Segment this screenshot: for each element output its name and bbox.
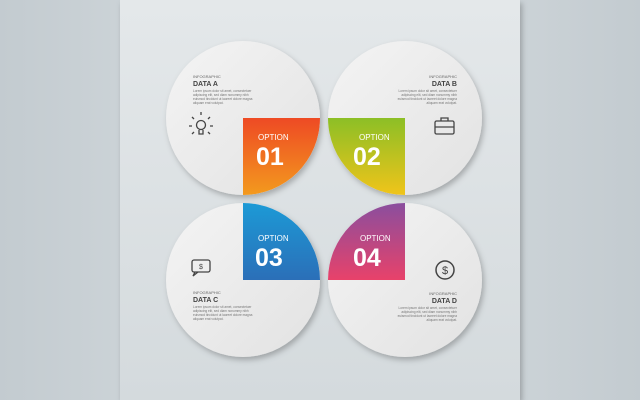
- text: data C: adipiscing elit, sed diam nonummy nibh: [193, 309, 249, 313]
- text: data D: euismod tincidunt ut laoreet dolore magna: [398, 314, 457, 318]
- circle C: [166, 203, 320, 357]
- text: data B: Lorem ipsum dolor sit amet, consectetuer: [399, 89, 458, 93]
- wedge: option 04: OPTION: [360, 234, 391, 243]
- icon: dollar coin: [436, 261, 454, 279]
- wedge: option 01: 01: [256, 143, 284, 171]
- text: data B: euismod tincidunt ut laoreet dolore magna: [398, 97, 457, 101]
- icon: lightbulb: [189, 112, 213, 134]
- wedge: option 04: 04: [353, 244, 381, 272]
- circle B: [328, 41, 482, 195]
- text: data B: aliquam erat volutpat.: [427, 101, 457, 105]
- text: data A: adipiscing elit, sed diam nonummy nibh: [193, 93, 249, 97]
- wedge: option 02: 02: [353, 143, 381, 171]
- wedge: option 01: OPTION: [258, 133, 289, 142]
- text: data A: INFOGRAPHIC: [193, 74, 221, 79]
- text: data D: INFOGRAPHIC: [429, 291, 457, 296]
- text: data A: Lorem ipsum dolor sit amet, consectetuer: [193, 89, 252, 93]
- text: data A: DATA A: [193, 81, 218, 88]
- text: data D: aliquam erat volutpat.: [427, 318, 457, 322]
- wedge: option 03: 03: [255, 244, 283, 272]
- text: data A: euismod tincidunt ut laoreet dolore magna: [193, 97, 253, 101]
- text: data C: euismod tincidunt ut laoreet dolore magna: [193, 313, 253, 317]
- text: data D: Lorem ipsum dolor sit amet, consectetuer: [399, 306, 458, 310]
- text: data A: [193, 74, 253, 105]
- wedge: option 02: OPTION: [359, 133, 390, 142]
- circle D: [328, 203, 482, 357]
- icon: chat: $: [199, 264, 203, 271]
- text: data B: adipiscing elit, sed diam nonummy nibh: [401, 93, 457, 97]
- text: data B: INFOGRAPHIC: [429, 74, 457, 79]
- wedge: option 04: [328, 203, 405, 280]
- wedge: option 01: [243, 118, 320, 195]
- icon: briefcase: [435, 118, 454, 134]
- text: data C: DATA C: [193, 297, 218, 304]
- panel: [120, 0, 520, 400]
- text: data B: DATA B: [432, 81, 457, 88]
- icon: dollar coin: $: [442, 265, 448, 277]
- wedge: option 02: [328, 118, 405, 195]
- text: data C: INFOGRAPHIC: [193, 290, 221, 295]
- text: data D: DATA D: [432, 298, 457, 305]
- text: data C: [193, 290, 253, 321]
- icon: chat: [192, 260, 210, 276]
- circle A: [166, 41, 320, 195]
- text: data D: [398, 291, 458, 322]
- wedge: option 03: [243, 203, 320, 280]
- text: data D: adipiscing elit, sed diam nonummy nibh: [401, 310, 457, 314]
- text: data C: Lorem ipsum dolor sit amet, consectetuer: [193, 305, 252, 309]
- text: data A: aliquam erat volutpat.: [193, 101, 224, 105]
- text: data C: aliquam erat volutpat.: [193, 317, 224, 321]
- text: data B: [398, 74, 458, 105]
- wedge: option 03: OPTION: [258, 234, 289, 243]
